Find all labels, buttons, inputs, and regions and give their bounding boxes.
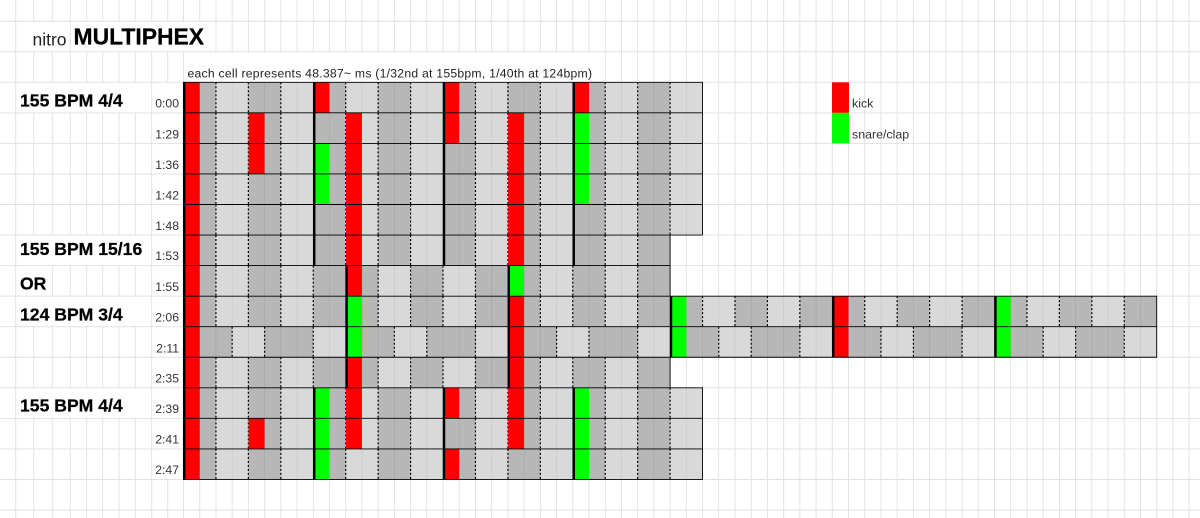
section labels: tempo and meter [20, 91, 142, 415]
legend [832, 82, 909, 143]
section labels: tempo and meter: OR [20, 274, 47, 294]
row 1:42 [184, 174, 703, 204]
timestamps column: 2:35 [155, 372, 179, 386]
timestamps column: 2:41 [155, 433, 179, 447]
grid caption: each cell represents 48.387~ ms (1/32nd at 155bpm, 1/40th at 124bpm) [188, 66, 592, 80]
timestamps column: 2:06 [155, 311, 179, 325]
section labels: tempo and meter: 124 BPM 3/4 [20, 304, 123, 324]
row 0:00 [184, 82, 703, 113]
row 1:55 [184, 266, 670, 296]
panel: drum pattern grid [184, 82, 1157, 480]
row 2:06 [184, 296, 1157, 327]
timestamps column: 1:53 [155, 249, 179, 263]
section labels: tempo and meter: 155 BPM 4/4 [20, 91, 123, 111]
title: nitro [32, 30, 67, 50]
timestamps column: 1:55 [155, 280, 179, 294]
row 1:48 [184, 204, 703, 235]
title: MULTIPHEX [74, 23, 205, 49]
timestamps column: 1:29 [155, 127, 179, 141]
section labels: tempo and meter: 155 BPM 15/16 [20, 239, 142, 259]
timestamps column: 1:36 [155, 158, 179, 172]
row 2:11 [184, 327, 1157, 357]
timestamps column: 2:11 [156, 341, 179, 355]
timestamps column: 0:00 [155, 97, 179, 111]
row 2:35 [184, 357, 1157, 388]
section labels: tempo and meter: 155 BPM 4/4 [20, 395, 123, 415]
legend: snare/clap: snare/clap [852, 127, 909, 141]
timestamps column: 2:39 [155, 402, 179, 416]
timestamps column [155, 97, 179, 477]
timestamps column: 2:47 [155, 463, 179, 477]
timestamps column: 1:42 [155, 188, 179, 202]
timestamps column: 1:48 [155, 219, 179, 233]
row 1:36 [184, 143, 703, 174]
row 2:39 [184, 388, 703, 418]
row 2:47 [184, 449, 703, 479]
row 2:41 [184, 418, 703, 449]
legend: kick: kick [852, 97, 874, 111]
row 1:29 [184, 113, 703, 143]
row 1:53 [184, 235, 703, 266]
